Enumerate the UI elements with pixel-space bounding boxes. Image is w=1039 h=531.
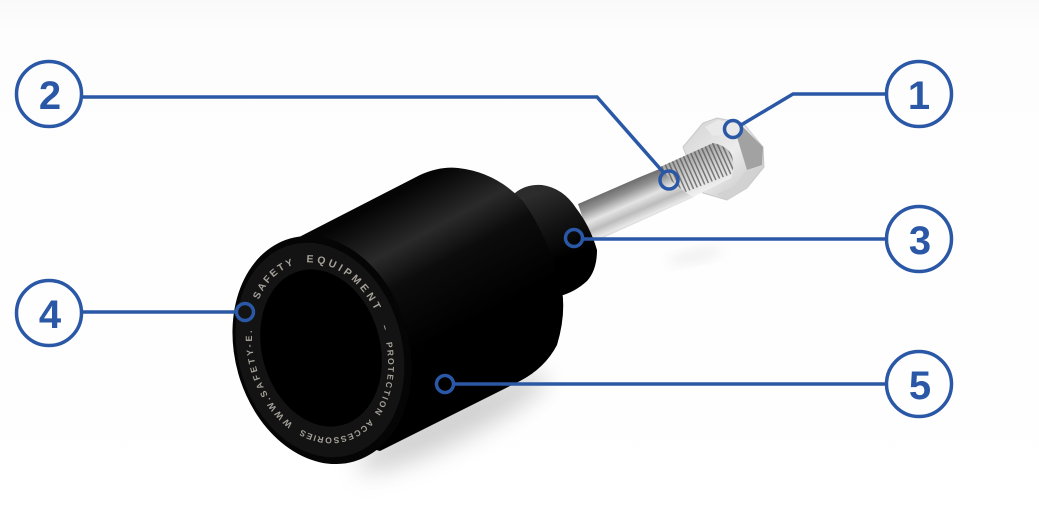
main cylinder (270, 168, 563, 451)
callout 1: 1 (908, 74, 930, 118)
product: frame slider (232, 99, 788, 481)
callout 3 (566, 206, 952, 272)
callout 1 (724, 62, 952, 138)
ring lettering: SAFETY (253, 258, 291, 299)
callout 3: 3 (909, 219, 931, 263)
ring lettering: WWW.SAFETY-E. (246, 331, 292, 428)
ring lettering (246, 255, 394, 444)
ring lettering: EQUIPMENT (307, 255, 382, 308)
callout 4 (16, 280, 254, 346)
lens opening (242, 255, 400, 441)
ring lettering: – (384, 325, 386, 330)
ground shadows (349, 245, 723, 486)
callout 2 (16, 62, 678, 189)
bolt thread (660, 143, 733, 197)
callout 5 (436, 352, 952, 416)
bolt rod (578, 168, 694, 240)
ring lettering: ACCESSORIES (300, 419, 372, 444)
callout 2: 2 (39, 74, 61, 118)
bolt head and washer (683, 118, 764, 200)
rear collar (510, 185, 597, 296)
front chamfer (206, 215, 438, 485)
callout 5: 5 (909, 364, 931, 408)
callout 4: 4 (39, 293, 62, 337)
front face ring (211, 223, 429, 477)
ring lettering: PROTECTION (375, 342, 394, 416)
